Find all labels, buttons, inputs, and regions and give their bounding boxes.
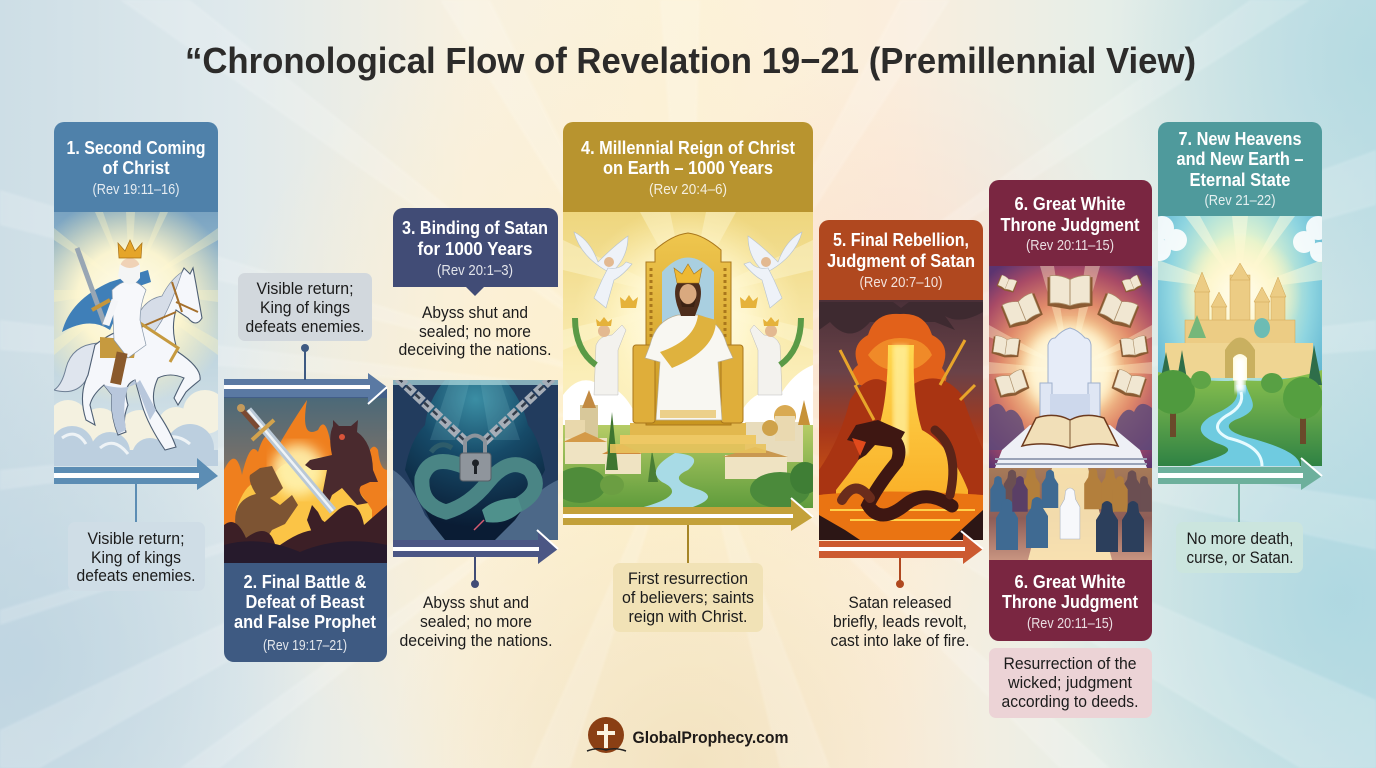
callout: step 1: defeats enemies. [76, 566, 196, 585]
header: step 2 [224, 563, 387, 662]
panel: 1 second coming of Christ [54, 122, 218, 588]
connector: step 3 [471, 557, 479, 588]
text: step 3 top [398, 303, 552, 359]
header: step 4 [563, 122, 813, 212]
callout: step 1: King of kings [91, 548, 181, 567]
connector: step 1 [135, 484, 137, 522]
header: step 3 [393, 208, 558, 296]
text: step 3 bottom: deceiving the nations. [400, 631, 552, 650]
panel: 3 binding of Satan [393, 208, 558, 650]
header: step 5: 5. Final Rebellion, [833, 230, 969, 250]
header: step 7: (Rev 21–22) [1204, 193, 1276, 209]
callout: step 7: curse, or Satan. [1186, 548, 1294, 567]
arrow: step 4 [563, 498, 813, 531]
callout: step 4: of believers; saints [622, 588, 754, 607]
header: step 3: for 1000 Years [418, 239, 532, 259]
text: step 3 top: sealed; no more [419, 322, 531, 341]
text: step 5 [830, 593, 970, 650]
arrow: step 3 [393, 530, 558, 564]
arrow: step 1 [54, 458, 218, 490]
callout: step 2 [238, 273, 372, 341]
icon: cross over book [587, 717, 626, 753]
dark foreground flames [224, 505, 387, 552]
illustration: Christ on the throne [554, 205, 820, 508]
platform [995, 425, 1147, 468]
steps [630, 423, 746, 435]
header: step 3: 3. Binding of Satan [402, 218, 548, 238]
small crowns [620, 295, 638, 308]
trees [1158, 345, 1322, 392]
callout: step 6: wicked; judgment [1007, 673, 1132, 692]
title: “Chronological Flow of Revelation 19−21 (Premillennial View) [185, 40, 1196, 81]
header: step 2: 2. Final Battle & [244, 572, 366, 592]
panel: 4 millennial reign [554, 122, 820, 632]
arrow: step 7 [1158, 458, 1322, 490]
connector: step 7 [1238, 484, 1240, 522]
tail [54, 343, 100, 392]
header: step 1: 1. Second Coming [66, 138, 206, 158]
arrow: step 5 [819, 531, 983, 564]
text: step 5: cast into lake of fire. [830, 631, 970, 650]
header: step 4: 4. Millennial Reign of Christ [581, 138, 795, 158]
header: step 4: on Earth – 1000 Years [603, 158, 773, 178]
callout: step 4: First resurrection [628, 569, 748, 588]
text: step 3 bottom: sealed; no more [420, 612, 532, 631]
serpent [431, 445, 452, 452]
sword [77, 248, 105, 325]
angels [574, 232, 802, 308]
callout: step 6: Resurrection of the [1004, 654, 1136, 673]
header: step 6 top: 6. Great White [1014, 194, 1126, 214]
land [1158, 370, 1322, 466]
header: step 1 [54, 122, 218, 212]
people [1004, 470, 1152, 512]
text: step 5: Satan released [848, 593, 952, 612]
illustration: rider on white horse [54, 212, 218, 466]
connector: step 4 [687, 525, 689, 563]
dragon [868, 432, 952, 515]
panel: 2 final battle [224, 273, 387, 662]
callout: step 2: Visible return; [256, 279, 354, 298]
mushroom cloud [852, 314, 946, 391]
header: step 3: (Rev 20:1–3) [437, 263, 513, 279]
connector: step 2 [301, 344, 309, 380]
callout: step 4 [613, 563, 763, 632]
river [640, 453, 708, 508]
illustration: chained serpent in abyss [393, 378, 558, 540]
header: step 7: and New Earth – [1176, 149, 1304, 169]
throne [1048, 328, 1091, 420]
cape [62, 270, 151, 332]
crowds far [989, 404, 1152, 450]
arrow: step 2 [224, 373, 387, 405]
callout: step 6: according to deeds. [1002, 692, 1138, 711]
mane [140, 271, 182, 331]
text: step 3 top: Abyss shut and [422, 303, 528, 322]
callout: step 2: King of kings [260, 298, 350, 317]
header: step 6 bottom: Throne Judgment [1002, 592, 1138, 612]
connector: step 5 [896, 558, 904, 588]
header: step 7: Eternal State [1190, 170, 1290, 190]
throne [646, 233, 731, 425]
header: step 5: (Rev 20:7–10) [860, 275, 942, 291]
beast left [235, 466, 298, 538]
header: step 6 bottom: (Rev 20:11–15) [1027, 616, 1113, 632]
header: step 1: (Rev 19:11–16) [92, 182, 180, 198]
illustration: throne, books and crowd [989, 266, 1152, 560]
callout: step 7 [1176, 522, 1303, 573]
horse [82, 268, 202, 450]
panel: 7 new heavens and new earth [1149, 122, 1330, 573]
clouds [1149, 216, 1330, 262]
wordmark: GlobalProphecy.com [632, 729, 788, 747]
illustration: dragon in lake of fire [819, 300, 983, 540]
text: step 3 bottom: Abyss shut and [423, 593, 529, 612]
header: step 4: (Rev 20:4–6) [649, 182, 727, 198]
header: step 6 bottom [989, 560, 1152, 641]
header: step 7 [1158, 122, 1322, 216]
text: step 3 top: deceiving the nations. [398, 340, 552, 359]
chain [398, 378, 552, 442]
header: step 2: (Rev 19:17–21) [263, 638, 347, 654]
header: step 6 top: Throne Judgment [1000, 215, 1140, 235]
callout: step 6 [989, 648, 1152, 718]
callout: step 1: Visible return; [88, 529, 184, 548]
saints [594, 325, 626, 395]
demon right [305, 420, 378, 505]
figure [645, 315, 733, 420]
crown [674, 264, 702, 283]
callout: step 1 [68, 522, 205, 591]
header: step 7: 7. New Heavens [1178, 129, 1302, 149]
callout: step 4: reign with Christ. [628, 607, 748, 626]
illustration: heavenly city and river [1149, 216, 1330, 466]
lava [819, 492, 983, 540]
crown [118, 240, 142, 258]
floor [989, 468, 1152, 560]
callout: step 7: No more death, [1186, 529, 1294, 548]
header: step 2: Defeat of Beast [246, 592, 364, 612]
open book [1022, 415, 1118, 448]
clouds [563, 380, 640, 425]
panel: 6 great white throne [989, 180, 1152, 718]
header: step 6 top [989, 180, 1152, 266]
city [1185, 263, 1295, 350]
callout: step 2: defeats enemies. [246, 317, 364, 336]
header: step 6 bottom: 6. Great White [1014, 572, 1126, 592]
panel: 5 final rebellion [819, 220, 983, 650]
river [1190, 385, 1300, 466]
books [1048, 276, 1092, 310]
header: step 2: and False Prophet [234, 612, 376, 632]
header: step 1: of Christ [102, 158, 170, 178]
logo: GlobalProphecy.com [587, 717, 788, 753]
rider [112, 281, 146, 358]
text: step 3 bottom [400, 593, 552, 650]
illustration: sword and beasts in flames [224, 390, 387, 565]
town and land [563, 425, 813, 508]
header: step 5 [819, 220, 983, 308]
header: step 5: Judgment of Satan [827, 251, 975, 271]
padlock [465, 436, 485, 453]
text: step 5: briefly, leads revolt, [833, 612, 967, 631]
clouds [54, 390, 218, 450]
header: step 6 top: (Rev 20:11–15) [1026, 238, 1114, 254]
sword [248, 410, 333, 511]
